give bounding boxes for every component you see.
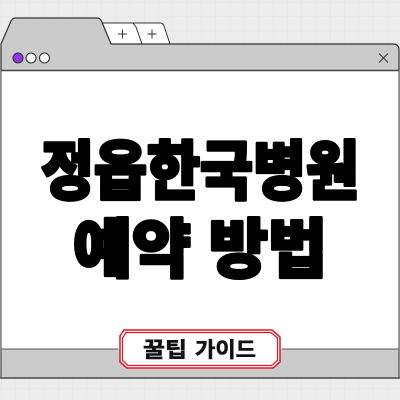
title: 정읍한국병원 [41, 136, 359, 208]
window control dots [13, 53, 50, 63]
content area [2, 71, 398, 349]
tab: plus tabs [102, 23, 170, 44]
badge: tips guide: 가이드 [195, 339, 256, 362]
title [41, 136, 359, 286]
badge: tips guide: 꿀팁 [143, 339, 187, 362]
badge: tips guide [120, 330, 280, 368]
title: 예약 방법 [73, 214, 327, 286]
icon: close [379, 54, 388, 62]
